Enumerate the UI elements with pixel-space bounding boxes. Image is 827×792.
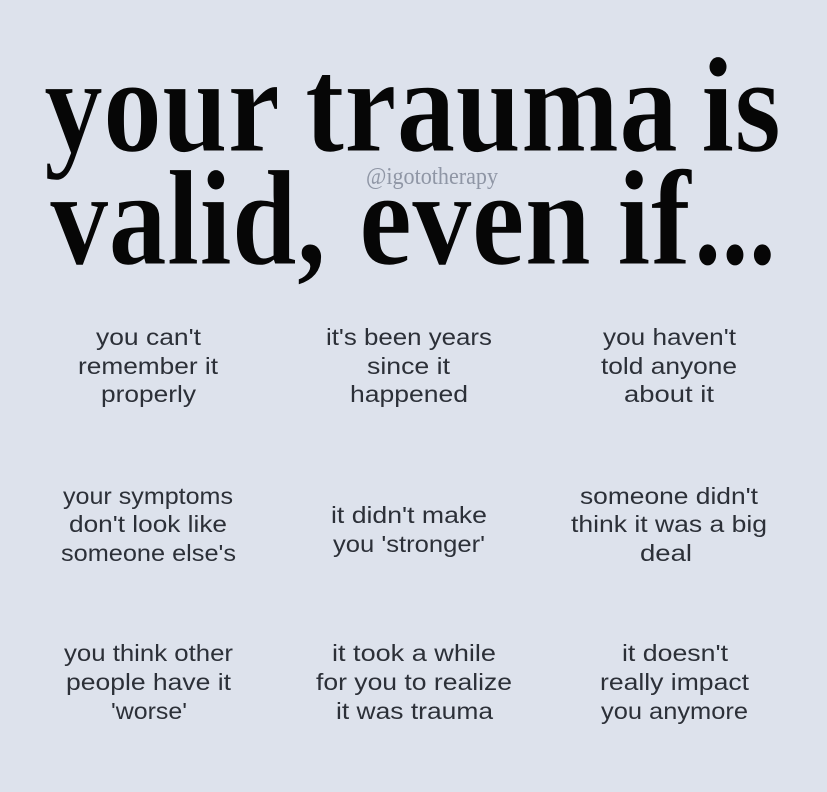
text block: big deal: someone didn't bbox=[580, 483, 759, 509]
text block: took a while: it took a while bbox=[332, 640, 496, 666]
title: if bbox=[617, 144, 693, 294]
text block: can't remember: you can't bbox=[96, 324, 202, 350]
text block: stronger: it didn't make bbox=[331, 502, 487, 528]
text block: worse bbox=[64, 640, 233, 724]
text block: symptoms: someone else's bbox=[61, 540, 236, 566]
text block: can't remember: properly bbox=[101, 381, 197, 407]
text block: big deal: think it was a big bbox=[571, 511, 767, 537]
text block: haven't told anyone: told anyone bbox=[601, 353, 737, 379]
text block: stronger: you 'stronger' bbox=[333, 531, 485, 557]
title: your bbox=[44, 31, 280, 181]
text block: years since: it's been years bbox=[326, 324, 492, 350]
text block: years since: since it bbox=[367, 353, 451, 379]
text block: big deal bbox=[571, 483, 767, 566]
title: valid, bbox=[50, 144, 326, 294]
text block: took a while bbox=[316, 640, 512, 724]
text block: no impact: you anymore bbox=[601, 698, 748, 724]
text block: can't remember: remember it bbox=[78, 353, 219, 379]
text block: haven't told anyone bbox=[601, 324, 737, 407]
text block: no impact bbox=[600, 640, 750, 724]
text block: worse: people have it bbox=[66, 669, 232, 695]
text block: no impact: it doesn't bbox=[622, 640, 729, 666]
text block: symptoms bbox=[61, 483, 236, 566]
title: is bbox=[701, 31, 781, 181]
text block: worse: 'worse' bbox=[111, 698, 187, 724]
title: even bbox=[359, 144, 591, 294]
text block: took a while: it was trauma bbox=[336, 698, 493, 724]
title bbox=[44, 31, 781, 294]
text block: symptoms: your symptoms bbox=[63, 483, 233, 509]
text block: no impact: really impact bbox=[600, 669, 750, 695]
text block: took a while: for you to realize bbox=[316, 669, 512, 695]
text block: big deal: deal bbox=[640, 540, 692, 566]
watermark handle: @igototherapy bbox=[366, 164, 498, 190]
title: ... bbox=[694, 144, 776, 294]
text block: worse: you think other bbox=[64, 640, 233, 666]
text block: years since: happened bbox=[350, 381, 468, 407]
text block: haven't told anyone: you haven't bbox=[603, 324, 737, 350]
text block: symptoms: don't look like bbox=[69, 511, 227, 537]
title: trauma bbox=[305, 31, 678, 181]
text block: stronger bbox=[331, 502, 487, 557]
text block: haven't told anyone: about it bbox=[624, 381, 715, 407]
text block: years since bbox=[326, 324, 492, 407]
text block: can't remember bbox=[78, 324, 219, 407]
